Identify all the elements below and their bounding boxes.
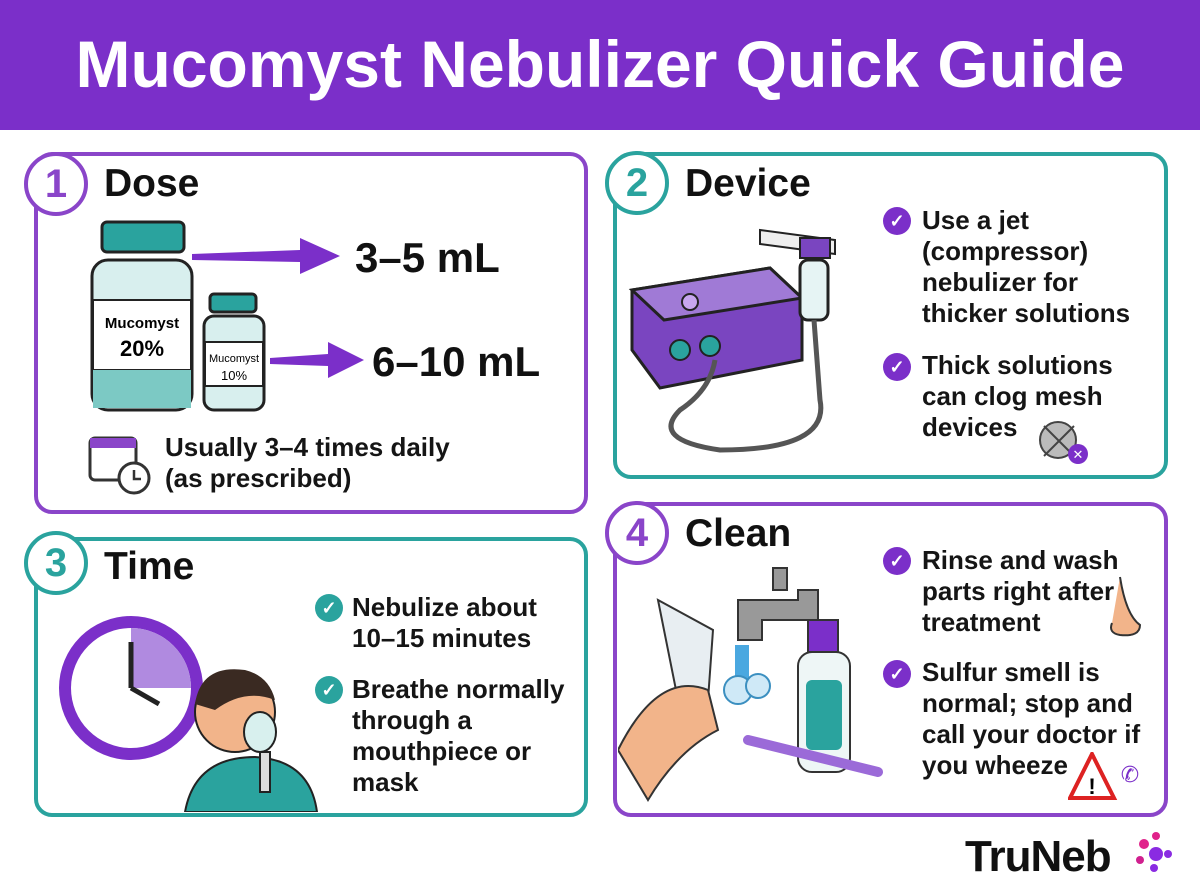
icon: bottles: Mucomyst	[105, 315, 179, 332]
logo: TruNeb: TruNeb	[965, 832, 1111, 881]
check d	[883, 660, 911, 688]
icon: nose	[1110, 576, 1141, 636]
text: frequency: Usually 3–4 times daily	[165, 432, 450, 462]
text 1: (compressor)	[922, 236, 1088, 266]
text b	[352, 674, 564, 797]
check 2	[883, 353, 911, 381]
number 1	[24, 152, 88, 216]
text d: Sulfur smell is	[922, 657, 1100, 687]
text b: mouthpiece or	[352, 736, 531, 766]
text d: call your doctor if	[922, 719, 1140, 749]
panel: dose	[34, 152, 588, 514]
icon: bottles: Mucomyst	[209, 353, 259, 365]
title: Mucomyst Nebulizer Quick Guide	[76, 27, 1124, 101]
icon: compressor nebulizer	[628, 228, 836, 452]
text c: Rinse and wash	[922, 545, 1118, 575]
check a: ✓	[321, 598, 337, 618]
icon: clogged mesh	[1039, 421, 1088, 464]
icon: warning and phone: !	[1088, 774, 1096, 799]
text: frequency: (as prescribed)	[165, 463, 351, 493]
list device	[883, 205, 1130, 442]
text b: Breathe normally	[352, 674, 564, 704]
icon: faucet, parts, soap, brush	[618, 567, 883, 802]
text b: mask	[352, 767, 418, 797]
text 2: devices	[922, 412, 1017, 442]
panel: clean	[613, 502, 1168, 817]
heading time: Time	[104, 545, 194, 588]
check c	[883, 547, 911, 575]
check c: ✓	[889, 551, 905, 571]
check 1	[883, 207, 911, 235]
text 2	[922, 350, 1113, 442]
check d: ✓	[889, 664, 905, 684]
list time	[315, 592, 564, 797]
text d: you wheeze	[922, 750, 1068, 780]
check b	[315, 676, 343, 704]
text c	[922, 545, 1118, 637]
heading clean: Clean	[685, 512, 791, 555]
text 1	[922, 205, 1130, 328]
dose 3-5: 3–5 mL	[355, 234, 500, 281]
icon: clock and person	[59, 616, 318, 812]
check a	[315, 594, 343, 622]
icon: calendar clock	[88, 436, 150, 494]
number 1: 1	[45, 162, 67, 206]
number 4: 4	[626, 511, 648, 555]
icon: warning and phone	[1068, 752, 1139, 800]
panel: device	[613, 152, 1168, 479]
text 2: can clog mesh	[922, 381, 1103, 411]
text 1: Use a jet	[922, 205, 1029, 235]
text a	[352, 592, 537, 653]
number 3: 3	[45, 541, 67, 585]
number 3	[24, 531, 88, 595]
icon: warning and phone: ✆	[1121, 762, 1139, 787]
icon: bottles: 20%	[120, 336, 164, 361]
icon: clogged mesh: ✕	[1073, 447, 1083, 462]
check b: ✓	[321, 680, 337, 700]
text 1: thicker solutions	[922, 298, 1130, 328]
text a: 10–15 minutes	[352, 623, 531, 653]
check 1: ✓	[889, 211, 905, 231]
text d: normal; stop and	[922, 688, 1133, 718]
list clean	[883, 545, 1140, 780]
text c: treatment	[922, 607, 1040, 637]
icon: bottles: 10%	[221, 368, 247, 383]
number 2	[605, 151, 669, 215]
icon: bottles	[90, 220, 266, 412]
number 4	[605, 501, 669, 565]
heading device: Device	[685, 162, 811, 205]
text a: Nebulize about	[352, 592, 537, 622]
header bar	[0, 0, 1200, 130]
dose 6-10: 6–10 mL	[372, 338, 540, 385]
check 2: ✓	[889, 357, 905, 377]
arrow 1	[192, 238, 340, 274]
text 2: Thick solutions	[922, 350, 1113, 380]
number 2: 2	[626, 161, 648, 205]
text b: through a	[352, 705, 472, 735]
text c: parts right after	[922, 576, 1114, 606]
text d	[922, 657, 1140, 780]
text 1: nebulizer for	[922, 267, 1078, 297]
panel: time	[34, 537, 588, 817]
text: frequency	[165, 432, 450, 493]
heading dose: Dose	[104, 162, 199, 205]
arrow 2	[270, 342, 364, 378]
